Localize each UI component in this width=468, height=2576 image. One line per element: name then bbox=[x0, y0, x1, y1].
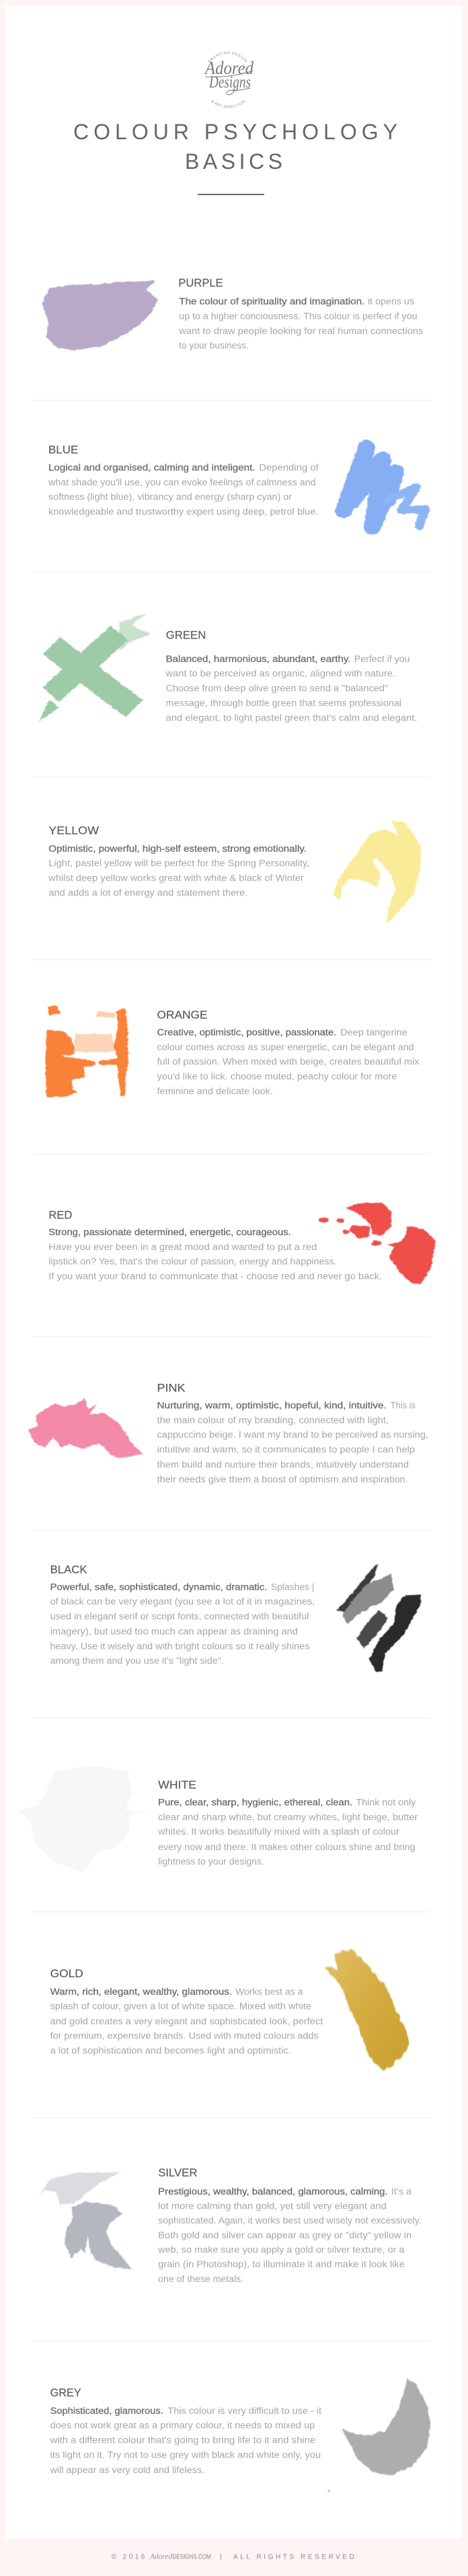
text block: pink: their needs give them a boost of optimism and inspiration. bbox=[157, 1475, 408, 1485]
text block: silver: Both gold and silver can appear as grey or "dirty" yellow in bbox=[158, 2230, 412, 2240]
text block: blue bbox=[48, 463, 319, 517]
text block: white: every now and there. It makes other colours shine and bring bbox=[158, 1842, 415, 1852]
text block: silver bbox=[157, 2186, 422, 2284]
text block: orange: Creative, optimistic, positive, passionate. bbox=[157, 1027, 336, 1037]
text block: silver: sophisticated. Again, it works best used wisely not excessively. bbox=[158, 2215, 422, 2225]
text block: green: and elegant, to light pastel green that's calm and elegant. bbox=[165, 713, 417, 723]
logo: Adored Designs bbox=[204, 51, 254, 108]
text block: blue: softness (light blue), vibrancy and energy (sharp cyan) or bbox=[48, 492, 292, 502]
text block: pink bbox=[157, 1401, 428, 1485]
text block: yellow: and adds a lot of energy and statement there. bbox=[48, 887, 247, 897]
text block: red: Have you ever been in a great mood and wanted to put a red bbox=[48, 1242, 317, 1252]
icon: black brush strokes bbox=[337, 1563, 421, 1672]
text block: gold: and gold creates a very elegant and sophisticated look, perfect bbox=[50, 2016, 323, 2026]
text block: red: lipstick on? Yes, that's the colour of passion, energy and happiness. bbox=[48, 1257, 337, 1267]
text block: pink: Nurturing, warm, optimistic, hopeful, kind, intuitive. bbox=[157, 1401, 387, 1410]
text block: gold: Works best as a bbox=[235, 1987, 303, 1997]
panel: white bbox=[18, 1767, 418, 1872]
heading: white: WHITE bbox=[158, 1778, 196, 1791]
text block: gold: a lot of sophistication and becomes light and optimistic. bbox=[50, 2045, 291, 2055]
panel: gold bbox=[50, 1949, 410, 2071]
text block: purple bbox=[178, 297, 424, 351]
heading: blue: BLUE bbox=[48, 443, 78, 456]
text block: blue: Depending of bbox=[259, 463, 319, 472]
text block: silver: lot more calming than gold, yet still very elegant and bbox=[158, 2201, 387, 2211]
text block: grey: its light on it. Try not to use grey with black and white only, you bbox=[50, 2450, 321, 2460]
text block: green bbox=[165, 654, 417, 723]
footer: | bbox=[220, 2553, 222, 2561]
text block: grey: Sophisticated, glamorous. bbox=[50, 2406, 163, 2416]
icon: blue scribble bbox=[344, 447, 425, 527]
text block: red: If you want your brand to communicate that - choose red and never go back. bbox=[48, 1271, 382, 1281]
icon: silver brush strokes bbox=[37, 2172, 132, 2269]
text block: purple: want to draw people looking for real human connections bbox=[178, 326, 424, 336]
heading: pink: PINK bbox=[157, 1382, 186, 1395]
text block: white: whites. It works beautifully mixed with a splash of colour bbox=[157, 1827, 399, 1837]
text block: grey: with a different colour that's going to bring life to it and shine bbox=[49, 2435, 315, 2445]
text block: white: clear and sharp white, but creamy whites, light beige, butter bbox=[158, 1812, 418, 1822]
text block: black: of black can be very elegant (you see a lot of it in magazines, bbox=[50, 1596, 315, 1607]
heading: gold: GOLD bbox=[50, 1967, 83, 1980]
text block: orange: colour comes across as super energetic, can be elegant and bbox=[157, 1042, 414, 1052]
icon: pink brush stroke bbox=[28, 1399, 143, 1458]
text block: black: among them and you use it's "light side". bbox=[50, 1656, 224, 1666]
text block: red: Strong, passionate determined, energetic, courageous. bbox=[48, 1227, 291, 1237]
text block: grey: will appear as very cold and lifeless. bbox=[50, 2465, 204, 2475]
text block: grey: does not work great as a primary colour, it needs to mixed up bbox=[50, 2421, 315, 2431]
text block: grey bbox=[49, 2406, 321, 2475]
icon: yellow brush stroke bbox=[334, 820, 421, 924]
text block: blue: Logical and organised, calming and inteligent. bbox=[48, 463, 256, 472]
text block: orange: you'd like to lick. choose muted, peachy colour for more bbox=[157, 1071, 397, 1082]
panel: black bbox=[50, 1563, 421, 1672]
text block: green: Perfect if you bbox=[354, 654, 410, 664]
panel: grey bbox=[49, 2378, 430, 2492]
title: COLOUR PSYCHOLOGY bbox=[73, 120, 397, 144]
text block: green: want to be perceived as organic, aligned with nature. bbox=[165, 669, 395, 679]
text block: red bbox=[48, 1227, 382, 1281]
text block: silver: Prestigious, wealthy, balanced, glamorous, calming. bbox=[158, 2186, 388, 2197]
text block: orange bbox=[157, 1027, 420, 1097]
text block: gold: Warm, rich, elegant, wealthy, glamorous. bbox=[50, 1987, 232, 1997]
heading: green: GREEN bbox=[166, 628, 206, 641]
text block: purple: to your business. bbox=[179, 340, 249, 351]
text block: orange: full of passion. When mixed with beige, creates beautiful mix bbox=[157, 1057, 420, 1067]
panel: green bbox=[39, 613, 418, 723]
text block: purple: it opens us bbox=[368, 297, 414, 307]
text block: pink: intuitive and warm, so it communicates to people I can help bbox=[157, 1444, 415, 1455]
icon: green cross brush bbox=[39, 613, 151, 722]
heading: grey: GREY bbox=[50, 2386, 81, 2399]
heading: orange: ORANGE bbox=[157, 1008, 207, 1021]
text block: pink: them build and nurture their brands, intuitively understand bbox=[157, 1460, 409, 1469]
icon: white splatter bbox=[18, 1767, 152, 1872]
text block: white: lightness to your designs. bbox=[158, 1857, 264, 1867]
text block: yellow bbox=[48, 844, 309, 897]
icon: orange textured brush bbox=[45, 1006, 128, 1097]
icon: grey crescent brush bbox=[327, 2378, 430, 2492]
text block: silver: It's a bbox=[391, 2186, 412, 2197]
text block: blue: what shade you'll use, you can evoke feelings of calmness and bbox=[48, 477, 316, 487]
text block: black: used in elegant serif or script fonts, connected with beautiful bbox=[50, 1611, 309, 1621]
heading: purple: PURPLE bbox=[178, 277, 223, 289]
text block: white: Think not only bbox=[356, 1798, 416, 1808]
footer: Adored bbox=[149, 2551, 173, 2561]
text block: black bbox=[50, 1582, 315, 1666]
text block: yellow: Light, pastel yellow will be perfect for the Spring Personality, bbox=[48, 858, 309, 869]
icon: red splatter brush bbox=[319, 1203, 436, 1284]
title: BASICS bbox=[185, 149, 282, 174]
text block: gold: splash of colour, given a lot of white space. Mixed with white bbox=[50, 2001, 311, 2012]
logo: Adored Designs: & ART DIRECTION bbox=[211, 100, 245, 108]
text block: purple: up to a higher conciousness. This colour is perfect if you bbox=[179, 311, 417, 322]
heading: yellow: YELLOW bbox=[48, 824, 99, 837]
text block: silver: grain (in Photoshop), to illuminate it and make it look like bbox=[158, 2259, 405, 2269]
icon: gold brush stroke bbox=[324, 1949, 410, 2071]
text block: pink: This is bbox=[391, 1401, 416, 1410]
heading: red: RED bbox=[48, 1208, 72, 1222]
panel: pink bbox=[28, 1382, 428, 1485]
text block: black: imagery), but used too much can appear as draining and bbox=[50, 1626, 298, 1636]
heading: black: BLACK bbox=[50, 1563, 87, 1576]
text block: white: Pure, clear, sharp, hygienic, ethereal, clean. bbox=[158, 1798, 352, 1808]
footer: © 2016 bbox=[112, 2553, 145, 2561]
panel: silver bbox=[37, 2166, 422, 2284]
logo: Adored Designs: Adored bbox=[204, 58, 254, 78]
text block: black: heavy. Use it wisely and with bright colours so it really shines bbox=[50, 1641, 310, 1651]
logo: Adored Designs: Designs bbox=[208, 73, 251, 91]
text block: gold bbox=[50, 1987, 323, 2055]
footer: DESIGNS.COM bbox=[172, 2553, 211, 2561]
text block: purple: The colour of spirituality and imagination. bbox=[179, 297, 364, 307]
text block: orange: Deep tangerine bbox=[340, 1027, 407, 1037]
text block: white bbox=[157, 1798, 418, 1867]
text block: green: Balanced, harmonious, abundant, earthy. bbox=[165, 654, 351, 664]
text block: yellow: Optimistic, powerful, high-self esteem, strong emotionally. bbox=[48, 844, 307, 854]
title bbox=[73, 120, 397, 174]
text block: pink: the main colour of my branding, connected with light, bbox=[157, 1415, 389, 1425]
text block: silver: one of these metals. bbox=[158, 2274, 243, 2284]
text block: grey: This colour is very difficult to use - it bbox=[167, 2406, 321, 2416]
panel: blue bbox=[48, 443, 425, 527]
logo: Adored Designs: BRANDING DESIGN bbox=[208, 51, 247, 63]
text block: gold: for premium, expensive brands. Used with muted colours adds bbox=[50, 2031, 319, 2041]
panel: red bbox=[48, 1203, 436, 1284]
text block: silver: web, so make sure you apply a gold or silver texture, or a bbox=[157, 2244, 405, 2255]
text block: black: Splashes | bbox=[271, 1582, 314, 1592]
text block: green: message, through bottle green that seems professional bbox=[165, 698, 401, 708]
icon: purple brush stroke bbox=[42, 281, 158, 350]
text block: green: Choose from deep olive green to send a "balanced" bbox=[165, 684, 388, 693]
text block: blue: knowledgeable and trustworthy expert using deep, petrol blue. bbox=[48, 507, 319, 517]
text block: orange: feminine and delicate look. bbox=[157, 1087, 273, 1097]
panel: orange bbox=[45, 1006, 420, 1097]
text block: yellow: whilst deep yellow works great with white & black of Winter bbox=[48, 873, 304, 883]
text block: black: Powerful, safe, sophisticated, dynamic, dramatic. bbox=[50, 1582, 267, 1592]
footer bbox=[112, 2551, 354, 2561]
panel: purple bbox=[42, 277, 424, 351]
footer: ALL RIGHTS RESERVED bbox=[233, 2553, 354, 2561]
heading: silver: SILVER bbox=[158, 2166, 197, 2179]
text block: pink: cappuccino beige. I want my brand to be perceived as nursing, bbox=[157, 1430, 428, 1440]
panel: yellow bbox=[48, 820, 421, 924]
